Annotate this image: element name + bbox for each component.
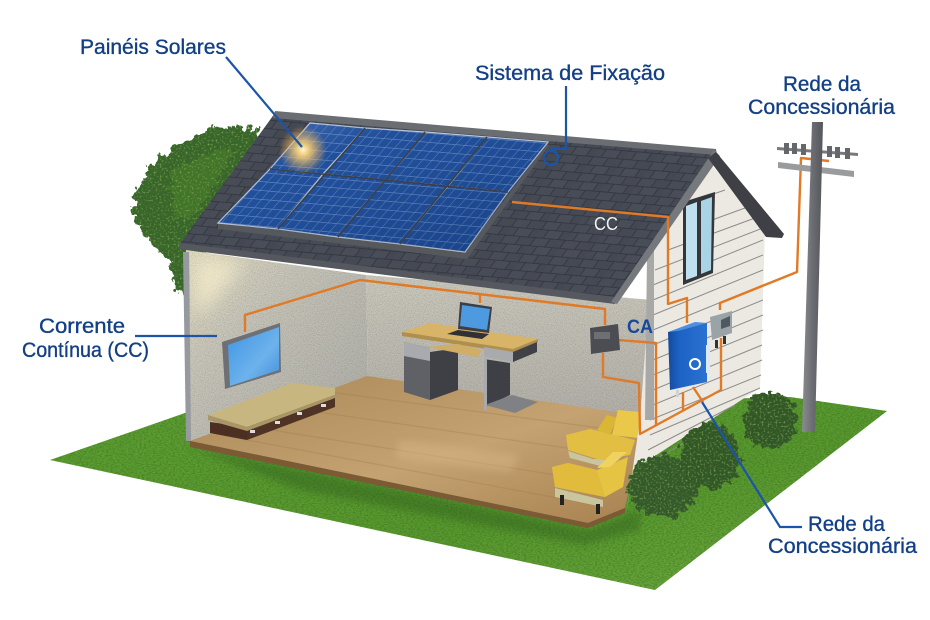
label: CA: CA bbox=[627, 317, 653, 338]
roof ridge, gutter and rake trim bbox=[180, 111, 784, 304]
label: Rede da Concessionária (bottom): Rede da bbox=[808, 513, 885, 536]
label: Sistema de Fixação: Sistema de Fixação bbox=[475, 62, 665, 85]
power meter bbox=[590, 324, 620, 354]
label: Corrente Contínua (CC): Corrente bbox=[39, 315, 125, 338]
solar panel array bbox=[218, 123, 548, 259]
label: Corrente Contínua (CC) bbox=[22, 315, 149, 362]
sun glare on panel bbox=[279, 126, 327, 174]
label: Rede da Concessionária (top) bbox=[748, 73, 895, 119]
interior back wall bbox=[366, 275, 652, 420]
wall-mounted TV bbox=[222, 323, 281, 389]
lawn bbox=[50, 397, 887, 590]
panel row top bbox=[270, 123, 548, 192]
tree behind house bbox=[134, 127, 258, 293]
sunlight glow on left wall bbox=[195, 258, 245, 315]
label: Corrente Contínua (CC): Contínua (CC) bbox=[22, 339, 149, 362]
shrubs bbox=[627, 392, 797, 517]
label: Rede da Concessionária (bottom): Concessionária bbox=[768, 535, 917, 558]
gable window bbox=[683, 192, 715, 285]
panel row bottom bbox=[218, 169, 508, 252]
grey disconnect box bbox=[710, 311, 732, 348]
interior left wall bbox=[186, 250, 368, 441]
label: Painéis Solares: Painéis Solares bbox=[80, 36, 226, 59]
blue leader lines bbox=[135, 57, 802, 527]
label: Rede da Concessionária (top): Concessionária bbox=[748, 96, 895, 119]
label: Rede da Concessionária (top): Rede da bbox=[783, 73, 861, 96]
utility pole bbox=[777, 122, 858, 432]
house side wall with siding bbox=[626, 163, 765, 515]
yellow armchairs bbox=[552, 410, 640, 514]
wooden floor bbox=[190, 376, 645, 528]
label: Rede da Concessionária (bottom) bbox=[768, 513, 917, 558]
roof shingles bbox=[180, 113, 715, 300]
bench with drawers bbox=[208, 383, 335, 440]
blue inverter bbox=[668, 322, 710, 397]
laptop bbox=[447, 302, 492, 339]
label: CC: CC bbox=[594, 214, 618, 234]
orange wiring bbox=[245, 158, 829, 434]
left wall edge bbox=[183, 252, 191, 441]
computer desk bbox=[402, 323, 538, 413]
